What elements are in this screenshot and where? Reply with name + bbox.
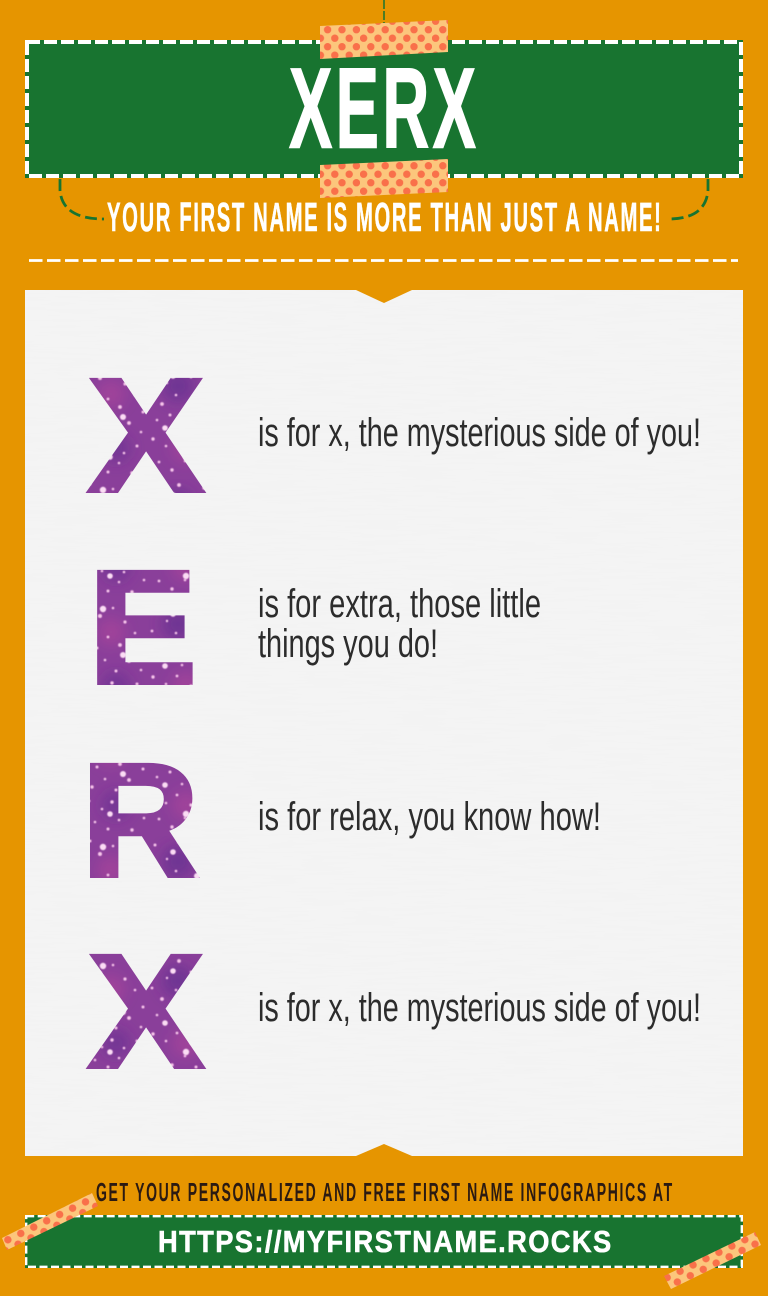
connector: right [668,179,708,219]
hanging string [383,0,385,24]
row: R [82,730,601,910]
letter X: X [89,922,203,1100]
letter X: X [89,346,203,524]
description: things you do! [258,622,438,666]
description: is for relax, you know how! [258,795,601,839]
row: E [89,538,541,716]
letter R: R [82,730,199,910]
tape: footer right [664,1232,761,1289]
tape: top [320,20,448,59]
letter E: E [89,538,196,716]
footer url: HTTPS://MYFIRSTNAME.ROCKS [158,1225,611,1259]
subtitle: YOUR FIRST NAME IS MORE THAN JUST A NAME! [107,194,661,240]
title banner [25,40,743,178]
tape: bottom [320,159,448,198]
footer caption: GET YOUR PERSONALIZED AND FREE FIRST NAME INFOGRAPHICS AT [96,1179,672,1207]
title: XERX [289,44,476,172]
footer banner [25,1215,743,1268]
tape: footer left [2,1193,98,1250]
divider [29,259,738,262]
row: X [89,922,701,1100]
panel: letters [25,290,743,1156]
row: X [89,346,701,524]
description [258,582,541,666]
connector: left [60,179,104,219]
description: is for extra, those little [258,582,541,626]
